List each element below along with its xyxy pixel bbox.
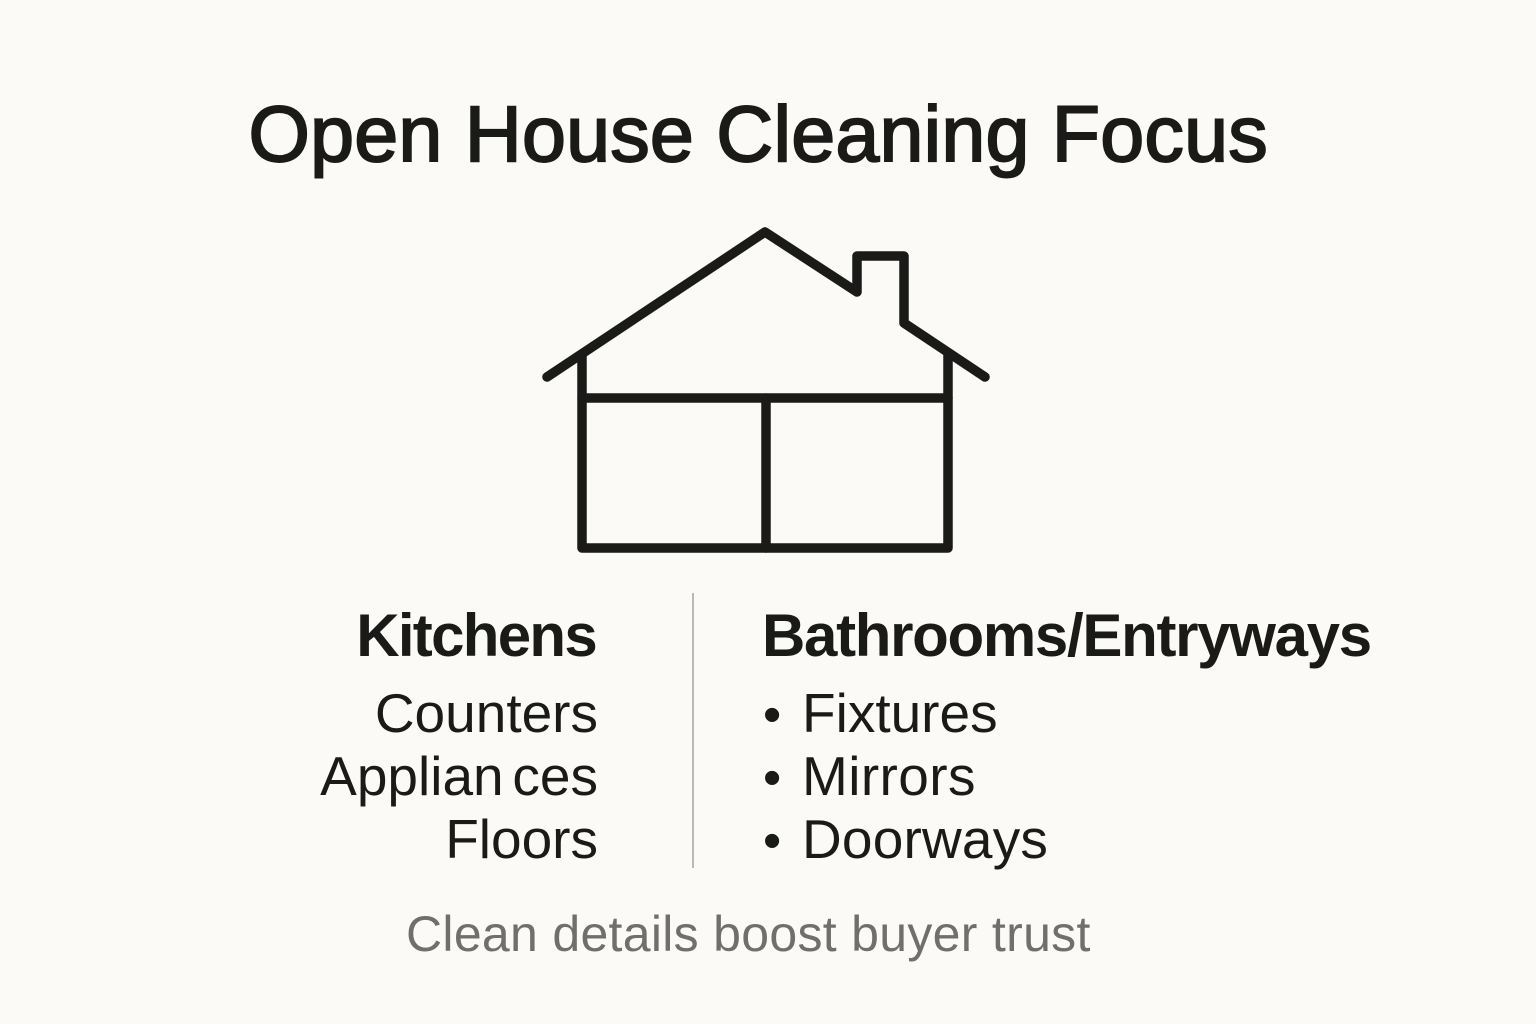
panel: kitchens: [320, 602, 598, 870]
items: Mirrors: [802, 745, 976, 807]
list: kitchen items: Applian ces: [320, 745, 598, 807]
list: kitchen items: [320, 682, 598, 870]
list: bathroom items: [763, 682, 1048, 870]
heading: kitchens: Kitchens: [356, 602, 596, 669]
tagline: Clean details boost buyer trust: [406, 906, 1091, 962]
items: Doorways: [802, 808, 1048, 870]
list: kitchen items: Floors: [445, 808, 598, 870]
divider: [692, 593, 694, 868]
bullets: •: [763, 812, 781, 870]
panel: bathrooms and entryways: [762, 602, 1371, 870]
list: kitchen items: Counters: [375, 682, 598, 744]
title: Open House Cleaning Focus: [248, 89, 1268, 178]
bullets: •: [763, 749, 781, 807]
heading: bathrooms and entryways: Bathrooms/Entryways: [762, 602, 1371, 669]
items: Fixtures: [802, 682, 998, 744]
bullets: •: [763, 686, 781, 744]
bullets: [763, 686, 781, 870]
items: [802, 682, 1048, 870]
